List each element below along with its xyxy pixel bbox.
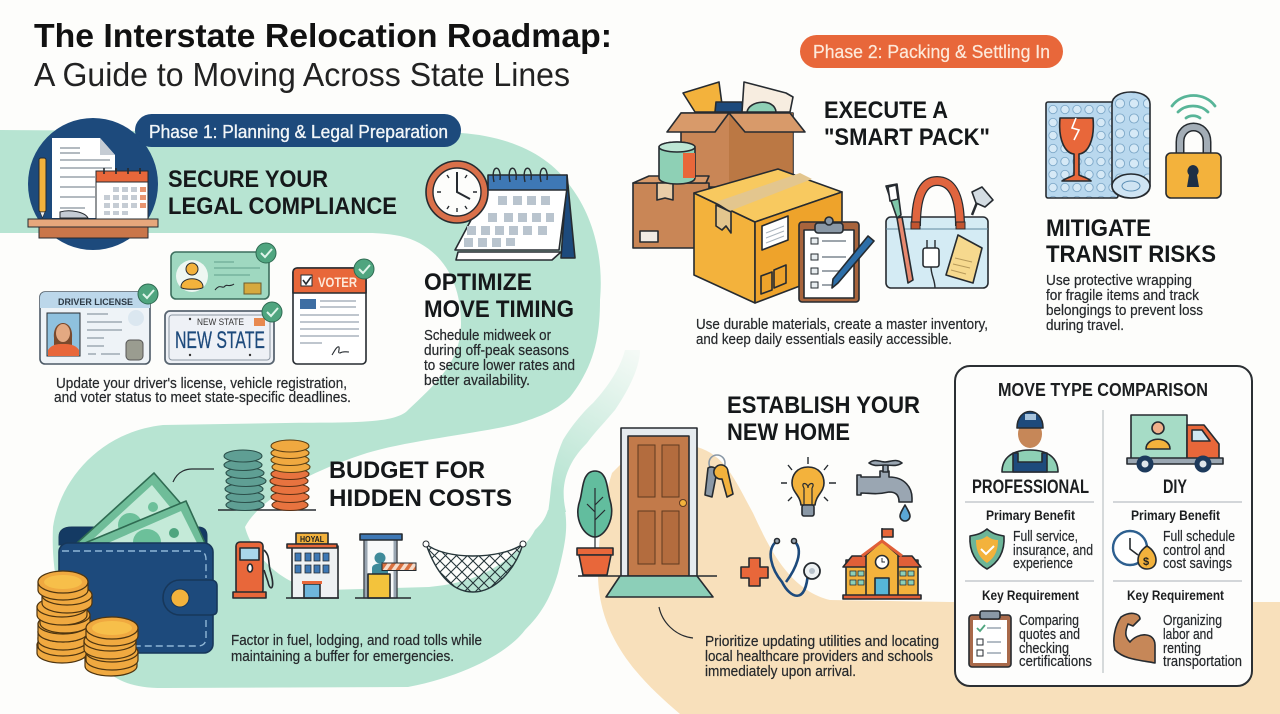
icon: coin stacks xyxy=(218,440,316,510)
text: move timing description: Schedule midweek or xyxy=(424,328,551,344)
heading: establish your new home: ESTABLISH YOUR xyxy=(727,392,920,419)
text: hidden costs description xyxy=(231,633,482,665)
heading: mitigate transit risks: MITIGATE xyxy=(1046,215,1151,242)
label: primary benefit diy: Primary Benefit xyxy=(1131,508,1220,523)
icon: shield xyxy=(970,529,1004,569)
heading: execute a smart pack: "SMART PACK" xyxy=(824,124,990,151)
text: diy requirement xyxy=(1163,613,1242,670)
icon: flexed arm xyxy=(1114,613,1155,663)
icon: front door xyxy=(578,428,717,597)
heading: secure your legal compliance xyxy=(168,166,397,220)
column heading: diy: DIY xyxy=(1163,477,1187,498)
heading: mitigate transit risks: TRANSIT RISKS xyxy=(1046,241,1216,268)
icon: license plate: NEW STATE xyxy=(175,327,265,354)
icon: inventory clipboard and pen xyxy=(799,217,874,302)
icon: voter form: VOTER xyxy=(318,274,357,290)
icon: water faucet xyxy=(857,460,912,521)
heading: optimize move timing: MOVE TIMING xyxy=(424,296,574,323)
text: smart pack description: Use durable materials, create a master inventory, xyxy=(696,317,988,333)
icon: toll booth xyxy=(355,534,416,598)
text: professional requirement: certifications xyxy=(1019,654,1092,670)
icon: fuel pump xyxy=(233,542,273,598)
heading: execute a smart pack xyxy=(824,97,990,151)
text: move timing description: better availability. xyxy=(424,373,530,389)
heading: secure your legal compliance: SECURE YOUR xyxy=(168,166,328,193)
phase 2 pill: Phase 2: Packing & Settling In xyxy=(813,42,1050,62)
text: legal compliance description xyxy=(54,376,351,406)
green path ribbon background xyxy=(0,130,601,688)
title: A Guide to Moving Across State Lines xyxy=(34,56,570,93)
text: legal compliance description: and voter status to meet state-specific deadlines. xyxy=(54,390,351,406)
text: professional requirement xyxy=(1019,613,1092,670)
icon: checklist clipboard xyxy=(969,611,1011,667)
text: transit risks description: for fragile items and track xyxy=(1046,288,1200,304)
text: diy requirement: Organizing xyxy=(1163,613,1222,629)
icon: stacked moving boxes xyxy=(633,82,842,303)
icon: potted plant xyxy=(577,471,613,575)
heading: optimize move timing xyxy=(424,269,574,323)
text: diy benefit: Full schedule xyxy=(1163,529,1235,545)
icon: clock and money bag: $ xyxy=(1143,556,1149,568)
icon: driver license card: DRIVER LICENSE xyxy=(58,297,133,308)
icon: driver license card xyxy=(40,284,158,364)
label: key requirement professional: Key Requirement xyxy=(982,588,1079,603)
heading: optimize move timing: OPTIMIZE xyxy=(424,269,532,296)
label: primary benefit professional: Primary Benefit xyxy=(986,508,1075,523)
text: professional requirement: quotes and xyxy=(1019,627,1080,643)
text: transit risks description xyxy=(1046,273,1203,334)
text: diy requirement: transportation xyxy=(1163,654,1242,670)
text: legal compliance description: Update your driver's license, vehicle registration, xyxy=(56,376,347,392)
icon: legal documents on shelf xyxy=(28,118,158,250)
text: professional benefit: insurance, and xyxy=(1013,543,1093,559)
heading: secure your legal compliance: LEGAL COMPLIANCE xyxy=(168,193,397,220)
icon: wifi signal and padlock xyxy=(1166,96,1221,198)
text: hidden costs description: maintaining a buffer for emergencies. xyxy=(231,649,454,665)
heading: budget for hidden costs: BUDGET FOR xyxy=(329,457,485,484)
icon: school building xyxy=(843,528,921,599)
text: smart pack description: and keep daily essentials easily accessible. xyxy=(696,332,952,348)
heading: establish your new home: NEW HOME xyxy=(727,419,850,446)
text: diy benefit xyxy=(1163,529,1235,572)
icon: safety net xyxy=(423,541,526,592)
text: professional requirement: Comparing xyxy=(1019,613,1079,629)
panel: move type comparison xyxy=(955,366,1252,686)
text: new home description: immediately upon arrival. xyxy=(705,664,856,680)
icon: diy rental truck xyxy=(1127,415,1223,472)
text: move timing description: to secure lower rates and xyxy=(424,358,575,374)
icon: clear essentials bag xyxy=(886,181,993,288)
phase 2 pill xyxy=(800,35,1063,68)
heading: execute a smart pack: EXECUTE A xyxy=(824,97,948,124)
text: move timing description: during off-peak seasons xyxy=(424,343,569,359)
text: diy benefit: cost savings xyxy=(1163,556,1232,572)
text: professional benefit: experience xyxy=(1013,556,1073,572)
text: diy requirement: labor and xyxy=(1163,627,1213,643)
text: transit risks description: during travel. xyxy=(1046,318,1124,334)
text: professional requirement: checking xyxy=(1019,641,1069,657)
icon: license plate: NEW STATE xyxy=(197,317,244,327)
heading: budget for hidden costs xyxy=(329,457,512,512)
text: new home description: Prioritize updating utilities and locating xyxy=(705,634,939,650)
icon: bubble wrap with fragile glass xyxy=(1046,92,1150,198)
icon: calendar and clock xyxy=(426,161,575,260)
title: The Interstate Relocation Roadmap: xyxy=(34,17,612,54)
text: smart pack description xyxy=(696,317,988,348)
icon: license plate xyxy=(165,302,282,364)
icon: medical cross and stethoscope xyxy=(741,538,820,596)
text: transit risks description: Use protective wrapping xyxy=(1046,273,1192,289)
text: hidden costs description: Factor in fuel, lodging, and road tolls while xyxy=(231,633,482,649)
icon: wallet with cash and coins xyxy=(37,469,217,676)
icon: hotel: HOYAL xyxy=(300,535,324,544)
text: professional benefit xyxy=(1013,529,1093,572)
text: professional benefit: Full service, xyxy=(1013,529,1078,545)
text: move timing description xyxy=(424,328,575,389)
phase 1 pill xyxy=(135,114,461,147)
phase 1 pill: Phase 1: Planning & Legal Preparation xyxy=(149,122,448,142)
peach path ribbon background xyxy=(598,447,1280,714)
icon: light bulb xyxy=(781,457,836,516)
icon: voter form xyxy=(293,259,374,364)
callout leader line xyxy=(659,607,693,638)
fading ribbon stripe xyxy=(548,350,640,512)
icon: professional mover xyxy=(1002,412,1058,472)
icon: green ID card xyxy=(171,243,276,299)
heading: budget for hidden costs: HIDDEN COSTS xyxy=(329,485,512,512)
text: diy requirement: renting xyxy=(1163,641,1201,657)
panel title: MOVE TYPE COMPARISON xyxy=(998,380,1208,400)
heading: establish your new home xyxy=(727,392,920,446)
text: transit risks description: belongings to prevent loss xyxy=(1046,303,1203,319)
label: key requirement diy: Key Requirement xyxy=(1127,588,1224,603)
icon: clock and money bag xyxy=(1113,531,1156,569)
title xyxy=(34,17,612,93)
text: new home description xyxy=(705,634,939,680)
column heading: professional: PROFESSIONAL xyxy=(972,477,1089,498)
heading: mitigate transit risks xyxy=(1046,215,1216,268)
icon: keys xyxy=(705,455,733,497)
text: diy benefit: control and xyxy=(1163,543,1225,559)
text: new home description: local healthcare providers and schools xyxy=(705,649,933,665)
icon: hotel xyxy=(286,533,339,598)
